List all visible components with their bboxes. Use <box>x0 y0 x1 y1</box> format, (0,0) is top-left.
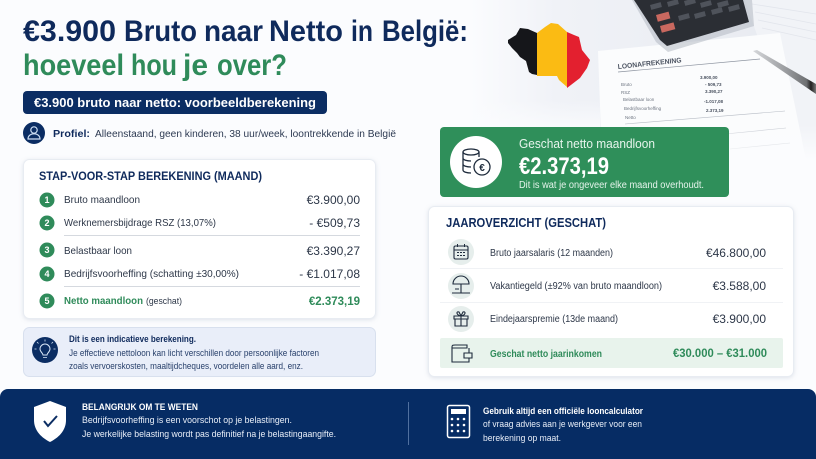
icon: calculator <box>448 406 470 438</box>
icon: parasol <box>448 273 474 299</box>
step numbers <box>40 192 54 308</box>
panel: stap-voor-stap berekening: 1 <box>44 195 50 205</box>
icon: wallet <box>452 345 472 362</box>
title: hou <box>131 49 177 82</box>
title: Bruto <box>124 15 197 48</box>
photo: calculator, payslip and pen: 3.390,27 <box>705 89 723 94</box>
subtitle pill: €3.900 bruto naar netto: voorbeeldberekening <box>34 95 316 110</box>
row labels: Vakantiegeld (±92% van bruto maandloon) <box>490 281 662 292</box>
callout: indicatieve berekening: Dit is een indicatieve berekening. <box>69 334 196 344</box>
row labels <box>490 248 662 360</box>
text: officiële looncalculator: of vraag advies aan je werkgever voor een <box>483 419 642 430</box>
icon: light bulb <box>32 337 58 363</box>
panel: stap-voor-stap berekening <box>24 160 376 318</box>
profile line: Profiel: <box>53 128 90 140</box>
photo: calculator, payslip and pen: Bruto <box>621 82 632 87</box>
row values: €3.900,00 <box>713 312 766 326</box>
row values: €2.373,19 <box>309 296 360 308</box>
profile line <box>23 122 396 144</box>
row values: €30.000 – €31.000 <box>673 346 767 360</box>
icon: coins <box>450 136 502 188</box>
icon: person <box>23 122 45 144</box>
callout: indicatieve berekening <box>24 328 376 376</box>
title: €3.900 <box>23 15 116 48</box>
panel: stap-voor-stap berekening: 4 <box>44 269 50 279</box>
title: naar <box>204 15 263 48</box>
photo: calculator, payslip and pen: Netto <box>625 115 636 120</box>
card: geschat netto maandloon: Geschat netto maandloon <box>519 137 655 151</box>
row labels: Werknemersbijdrage RSZ (13,07%) <box>64 217 216 229</box>
title: je <box>182 49 208 82</box>
callout: indicatieve berekening: zoals vervoerskosten, maaltijdcheques, voordelen alle aard, enz. <box>69 361 303 371</box>
panel: stap-voor-stap berekening: 5 <box>44 296 50 306</box>
map: Belgium flag <box>508 23 590 88</box>
panel: stap-voor-stap berekening: 2 <box>44 218 50 228</box>
row labels: Bruto jaarsalaris (12 maanden) <box>490 248 613 259</box>
text: officiële looncalculator: berekening op maat. <box>483 433 561 444</box>
title <box>23 15 468 82</box>
callout: indicatieve berekening: Je effectieve nettoloon kan licht verschillen door persoonlijke factoren <box>69 348 319 358</box>
photo: calculator, payslip and pen: LOONAFREKENING <box>617 57 682 71</box>
text: belangrijk om te weten: BELANGRIJK OM TE WETEN <box>82 402 198 412</box>
text: belangrijk om te weten: Bedrijfsvoorheffing is een voorschot op je belastingen. <box>82 415 292 426</box>
photo: calculator, payslip and pen <box>470 0 816 160</box>
title: in <box>351 15 373 48</box>
row labels: Bruto maandloon <box>64 194 140 206</box>
row values: €3.900,00 <box>307 193 360 207</box>
row values: €3.390,27 <box>307 244 360 258</box>
row labels: Geschat netto jaarinkomen <box>490 349 602 360</box>
title: over? <box>217 49 287 82</box>
panel: jaaroverzicht <box>428 206 794 376</box>
row labels: Netto maandloon <box>64 295 143 307</box>
title: hoeveel <box>23 49 124 82</box>
subtitle pill <box>23 91 327 114</box>
row values: - €509,73 <box>309 216 360 230</box>
profile line: Alleenstaand, geen kinderen, 38 uur/week, loontrekkende in België <box>95 129 396 140</box>
footer band <box>0 389 816 459</box>
icon: shield <box>34 401 66 442</box>
row labels <box>64 194 239 307</box>
card: geschat netto maandloon: Dit is wat je ongeveer elke maand overhoudt. <box>519 180 704 191</box>
heading: JAAROVERZICHT (GESCHAT) <box>446 216 606 230</box>
photo: calculator, payslip and pen: Belastbaar loon <box>623 97 655 102</box>
row labels: (geschat) <box>146 296 182 306</box>
row labels: Eindejaarspremie (13de maand) <box>490 314 618 325</box>
photo: calculator, payslip and pen: -1.017,08 <box>704 99 724 104</box>
row values <box>299 193 360 308</box>
photo: calculator, payslip and pen: 2.373,19 <box>706 108 724 113</box>
icon: gift <box>448 306 474 332</box>
title: België: <box>382 15 468 48</box>
row labels: Belastbaar loon <box>64 245 132 257</box>
text: officiële looncalculator: Gebruik altijd een officiële looncalculator <box>483 406 643 417</box>
card: geschat netto maandloon <box>440 127 729 197</box>
row values: €3.588,00 <box>713 279 766 293</box>
row values: - €1.017,08 <box>299 267 360 281</box>
row labels: Bedrijfsvoorheffing (schatting ±30,00%) <box>64 268 239 280</box>
photo: calculator, payslip and pen: 3.900,00 <box>700 75 718 80</box>
panel: stap-voor-stap berekening: 3 <box>44 245 50 255</box>
text: officiële looncalculator <box>483 406 643 444</box>
photo: calculator, payslip and pen: - 509,73 <box>705 82 722 87</box>
title: Netto <box>269 15 343 48</box>
row values: €46.800,00 <box>706 246 766 260</box>
heading: STAP-VOOR-STAP BEREKENING (MAAND) <box>39 169 262 183</box>
row values <box>673 246 767 360</box>
total row background <box>440 338 783 368</box>
photo: calculator, payslip and pen: Bedrijfsvoorheffing <box>624 106 662 111</box>
photo: calculator, payslip and pen: RSZ <box>621 90 630 95</box>
card: geschat netto maandloon: €2.373,19 <box>519 153 609 180</box>
icon: coins: € <box>479 163 485 174</box>
text: belangrijk om te weten: Je werkelijke belasting wordt pas definitief na je belastingaangifte. <box>82 429 336 440</box>
text: belangrijk om te weten <box>82 402 336 440</box>
icon: calendar <box>448 239 474 265</box>
